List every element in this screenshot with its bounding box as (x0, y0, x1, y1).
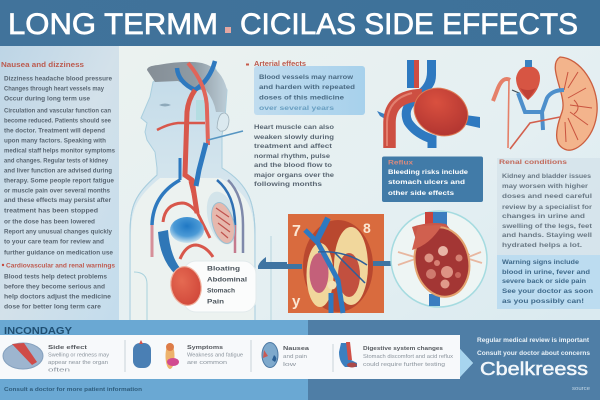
strip item 2: Weakness and fatigue (187, 352, 243, 358)
panel: bottom right conclusion: Consult your doctor about concerns (477, 350, 590, 357)
panel: bottom band left (0, 320, 308, 400)
panel: orange kidney square: y (292, 293, 301, 310)
panel: dark blue info box: Reflux (388, 160, 414, 166)
left lobe (306, 243, 334, 307)
highlighted note (497, 255, 600, 309)
vein: blue neck and side (196, 143, 206, 186)
small stub left (377, 111, 387, 120)
strip item 2: Symptoms (187, 345, 223, 351)
body text: right column: review by a specialist for (502, 205, 593, 211)
body text: right column: changes in urine and (502, 214, 585, 220)
body text: left column (4, 76, 116, 310)
strip item 2: are common (187, 360, 227, 366)
illustration: small heart and kidney (493, 57, 597, 150)
icon: blue stomach (339, 342, 357, 368)
body text: left column: the doctor. Treatment will depend (4, 128, 105, 134)
body text: left column: before they become serious and (4, 284, 105, 290)
body text: left column: therapy. Some people report fatigue (4, 178, 115, 184)
arrow: from kidney to callout (258, 257, 287, 269)
heading: upper middle: Arterial effects (254, 61, 306, 68)
body text: right column (502, 174, 593, 249)
hair (147, 62, 227, 112)
callout: white bubble: Stomach (207, 288, 235, 294)
callout: white bubble: Pain (207, 298, 224, 306)
panel numerals: 7 (292, 223, 301, 240)
red arch (180, 245, 213, 259)
body text: under note box: and the blood flow to (254, 163, 332, 169)
body text: left column: and these effects may persist after (4, 198, 112, 204)
body text: left column: upon many factors. Speaking with (4, 138, 106, 144)
body text: right column: may worsen with higher (502, 184, 589, 190)
body text: left column: Occur during long term use (4, 96, 91, 102)
blue connector (512, 90, 519, 93)
body text: left column: treatment has been stopped (4, 208, 98, 214)
artery: red main (188, 63, 208, 145)
body text: left column: Changes through heart vessels may (4, 86, 105, 92)
strip item 4: could require further testing (363, 362, 445, 368)
body text: right column: hydrated helps a lot. (502, 243, 582, 249)
title banner: LONG TERMM (8, 8, 218, 41)
blue vessels top (407, 60, 414, 88)
strip item 4 (339, 342, 454, 368)
body text: left column: become reduced. Patients should see (4, 118, 112, 124)
panel: right light text box (497, 158, 600, 309)
small heart (516, 66, 540, 100)
body outline (130, 68, 255, 320)
icon: red organ (167, 264, 205, 308)
body text: right column: swelling of the legs, feet (502, 224, 592, 230)
body text: under note box: major organs over the (254, 173, 335, 179)
panel: orange kidney square: 8 (363, 220, 371, 236)
body text: under note box: treatment and affect (254, 144, 332, 150)
body text: left column: further guidance on medication use (4, 250, 114, 256)
strip dividers (125, 340, 333, 372)
panel: bottom right conclusion (477, 337, 590, 392)
body text: right column: doses and need careful (502, 194, 592, 200)
blue tube (158, 230, 180, 275)
body text: left column: Dizziness headache blood pressure (4, 76, 113, 82)
strip item 3: Nausea (283, 346, 310, 352)
cap (412, 223, 470, 255)
blue vessels (305, 230, 343, 313)
vessels (425, 212, 433, 226)
body text: left column: and liver function are advised during (4, 168, 112, 174)
heart body (407, 80, 475, 144)
body text: left column: Blood tests help detect problems (4, 274, 108, 280)
salmon vessel (493, 79, 510, 101)
blue vein through (406, 98, 432, 148)
panel: upper middle text (246, 61, 365, 188)
blue note box: and harden with repeated (259, 84, 355, 91)
panel: dark blue info box: other side effects (388, 190, 455, 197)
body text: left column: Report any unusual changes quickly (4, 230, 113, 236)
highlighted note: as you possibly can! (502, 298, 584, 305)
blue stub right (462, 115, 480, 128)
vein: blue top Y (177, 61, 215, 90)
illustration: circular organ cross-section (391, 211, 487, 307)
lower torso lighter fill (131, 178, 254, 320)
panel: bottom right conclusion: source (572, 386, 590, 392)
blue note box: doses of this medicine (259, 94, 344, 102)
body text: under note box: Heart muscle can also (254, 125, 334, 131)
highlighted note: See your doctor as soon (502, 288, 593, 295)
strip item 1: Swelling or redness may (48, 352, 110, 358)
body text: under note box: normal rhythm, pulse (254, 154, 331, 160)
panel: dark blue info box (382, 156, 483, 202)
connector bar: left of kidney (285, 264, 302, 269)
body text: right column: Kidney and bladder issues (502, 174, 592, 180)
panel: dark blue info box: stomach ulcers and (388, 179, 465, 186)
strip item 1: often (48, 368, 70, 374)
lung outline: right (201, 188, 243, 248)
blue note box: over several years (259, 105, 334, 112)
lung: blue (170, 217, 204, 243)
body (408, 222, 476, 302)
icon: blue pill and figure (133, 340, 179, 369)
body text: left column: medical staff helps monitor symptoms (4, 148, 116, 154)
illustration: human figure with vessels (130, 61, 271, 320)
body text: left column: to your care team for review and (4, 240, 104, 246)
red subheading: left column: Cardiovascular and renal warnings (6, 262, 115, 270)
eye and ear (159, 104, 171, 106)
strip item 4: Stomach discomfort and acid reflux (363, 354, 454, 360)
strip item 3: low (283, 362, 297, 368)
red aorta (390, 95, 422, 148)
lung: pink (207, 200, 239, 246)
strip item 1 (3, 343, 110, 374)
body text: left column: help doctors adjust the medicine (4, 294, 112, 300)
connector bar: kidney to circle (373, 261, 392, 266)
heading: left column: Nausea and dizziness (1, 60, 84, 69)
panel: dark blue info box: Bleeding risks include (388, 169, 469, 176)
red line (510, 117, 560, 149)
kidney (555, 57, 597, 150)
highlighted note: severe back or side pain (502, 278, 586, 285)
title banner (0, 0, 600, 46)
highlighted note: Warning signs include (502, 259, 580, 266)
callout: white bubble: Bloating (207, 266, 240, 272)
teal neck vessel (196, 100, 206, 120)
panel: white strip with arrow (0, 335, 473, 379)
right lobe (334, 227, 368, 305)
body text: under note box: following months (254, 182, 323, 188)
blue note box: Blood vessels may narrow (259, 74, 354, 81)
panel: left text column (0, 46, 119, 320)
body text: left column: and changes. Regular tests of kidney (4, 158, 109, 164)
strip item 2 (133, 340, 243, 369)
artery: red branches (163, 203, 197, 222)
body text: left column: Circulation and vascular function can (4, 108, 111, 114)
strip item 1: Side effect (48, 345, 87, 351)
heading: bottom: INCONDAGY (4, 326, 72, 337)
strip item 4: Digestive system changes (363, 346, 443, 352)
body text: left column: or muscle pain over several months (4, 188, 111, 194)
footnote text: Consult a doctor for more patient information (4, 387, 143, 393)
panel: bottom right conclusion: Regular medical review is important (477, 337, 590, 344)
icon: capsule organ (3, 343, 43, 369)
panel: bottom band right (308, 320, 600, 400)
body text: right column: and hands. Staying well (502, 233, 592, 239)
body text: under note box: weaken slowly during (253, 135, 334, 141)
body text: under note box (253, 125, 335, 188)
panel: orange kidney square (288, 214, 384, 313)
strip item 3 (262, 342, 310, 368)
highlighted note: blood in urine, fever and (502, 269, 590, 276)
shoulder side line (134, 272, 147, 320)
callout: white bubble: Abdominal (207, 276, 247, 284)
blue note box (254, 66, 365, 115)
big word: Cbelkreess (480, 359, 588, 379)
title banner: CICILAS SIDE EFFECTS (240, 8, 578, 41)
strip item 1: appear near the organ (48, 360, 108, 366)
body text: left column: or the dose has been lowered (4, 220, 95, 226)
illustration: heart with vessels (377, 60, 480, 148)
strip item 3: and pain (283, 354, 307, 360)
heading: right column: Renal conditions (499, 159, 567, 166)
callout: white bubble (183, 261, 256, 312)
body text: left column: dose for better long term care (4, 304, 102, 310)
icon: round organ (262, 342, 278, 368)
